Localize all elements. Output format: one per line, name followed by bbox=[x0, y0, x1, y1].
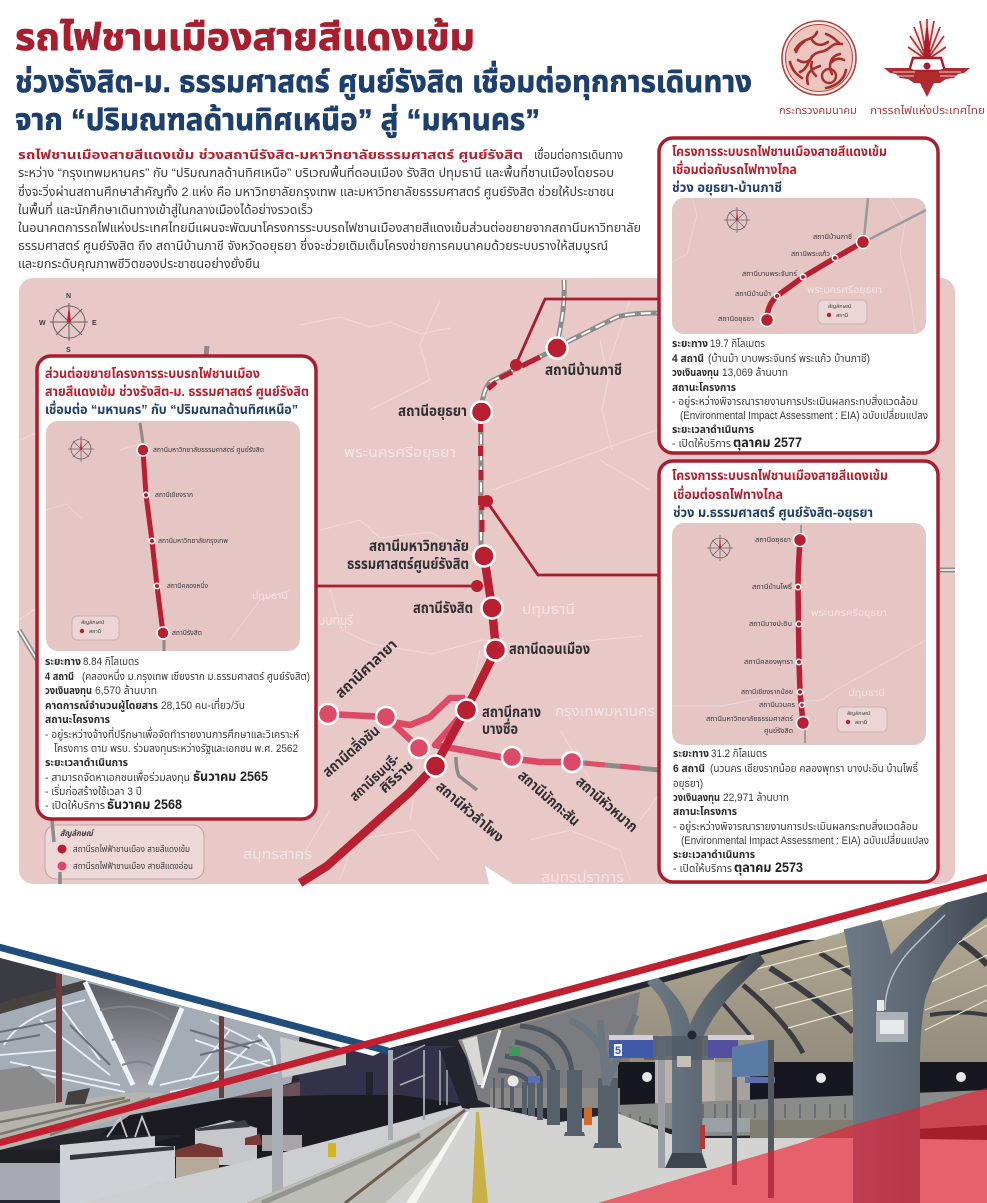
light red line bbox=[328, 698, 572, 762]
project details: ตุลาคม 2573 bbox=[734, 860, 803, 876]
project details: วงเงินลงทุน bbox=[673, 792, 720, 804]
connector dots bbox=[471, 359, 522, 592]
heading: ช่วง ม.ธรรมศาสตร์ ศูนย์รังสิต-อยุธยา bbox=[673, 505, 873, 521]
station labels: สถานีธนบุรี- bbox=[346, 750, 403, 805]
station labels: สถานีหัวหมาก bbox=[572, 773, 641, 836]
route inset map: สถานีคลองพุทรา bbox=[744, 658, 793, 667]
project details: ตุลาคม 2577 bbox=[733, 435, 802, 451]
station labels: สถานีอยุธยา bbox=[398, 403, 467, 420]
legend: สถานีรถไฟฟ้าชานเมือง สายสีแดงเข้ม bbox=[73, 844, 190, 854]
subtitle: ช่วงรังสิต-ม. ธรรมศาสตร์ ศูนย์รังสิต เชื่อมต่อทุกการเดินทาง bbox=[15, 60, 752, 100]
project details: (คลองหนึ่ง ม.กรุงเทพ เชียงราก ม.ธรรมศาสตร์ ศูนย์รังสิต) bbox=[82, 668, 310, 683]
project details: - เริ่มก่อสร้างใช้เวลา 3 ปี bbox=[45, 784, 142, 798]
route inset map: สถานี bbox=[836, 312, 848, 319]
intro text block: ธรรมศาสตร์ ศูนย์รังสิต ถึง สถานีบ้านภาชี จังหวัดอยุธยา ซึ่งจะช่วยเติมเต็มโครงข่ายการคมนาคมด้วยระบบรางให้สมบูรณ์ bbox=[18, 237, 608, 253]
province labels bbox=[243, 444, 655, 886]
red floor overlay bbox=[598, 1088, 987, 1203]
project details: - อยู่ระหว่างพิจารณารายงานการประเมินผลกระทบสิ่งแวดล้อม bbox=[673, 819, 918, 833]
route inset map: สัญลักษณ์ bbox=[847, 710, 870, 717]
project details: ระยะทาง bbox=[672, 338, 708, 350]
project details: วงเงินลงทุน bbox=[45, 685, 92, 697]
project details: 6 สถานี bbox=[673, 763, 705, 775]
panel: Thammasat-Ayutthaya bbox=[659, 461, 938, 882]
logo: State Railway of Thailand bbox=[870, 19, 985, 117]
heading: โครงการระบบรถไฟชานเมืองสายสีแดงเข้ม bbox=[672, 144, 887, 159]
project details: 22,971 ล้านบาท bbox=[723, 792, 789, 804]
project details: สถานะโครงการ bbox=[673, 806, 737, 818]
project details: (นวนคร เชียงรากน้อย คลองพุทรา บางปะอิน บ้านโพธิ์ bbox=[710, 762, 918, 775]
route inset map bbox=[46, 421, 300, 651]
signs: 5 bbox=[615, 1045, 621, 1057]
station labels: สถานีตลิ่งชัน bbox=[318, 721, 383, 781]
province labels: สมุทรสาคร bbox=[243, 846, 312, 863]
project details: ธันวาคม 2568 bbox=[107, 797, 182, 812]
route inset map: สถานีนวนคร bbox=[759, 701, 796, 709]
intro text block: ในพื้นที่ และนักศึกษาเดินทางเข้าสู่ในกลางเมืองได้อย่างรวดเร็ว bbox=[18, 201, 313, 217]
route inset map: ปทุมธานี bbox=[252, 590, 288, 602]
intro text block: ซึ่งจะวิ่งผ่านสถานศึกษาสำคัญทั้ง 2 แห่ง คือ มหาวิทยาลัยกรุงเทพ และมหาวิทยาลัยธรรมศาสตร์ ศูนย์รังสิต ช่วยให้ประชาชน bbox=[18, 183, 614, 199]
project details: - เปิดให้บริการ bbox=[673, 863, 732, 875]
route inset map bbox=[672, 523, 926, 745]
heading: เชื่อมต่อกับรถไฟทางไกล bbox=[672, 160, 797, 177]
route inset map: สถานีเชียงราก bbox=[155, 491, 193, 499]
stations bbox=[318, 338, 582, 776]
project details bbox=[672, 338, 928, 451]
project details: สถานะโครงการ bbox=[672, 382, 736, 394]
station labels: สถานีมักกะสัน bbox=[514, 767, 583, 830]
project details: คาดการณ์จำนวนผู้โดยสาร bbox=[45, 699, 158, 712]
left roof bbox=[0, 955, 300, 1150]
station labels: บางซื่อ bbox=[482, 718, 518, 738]
project details: ระยะทาง bbox=[673, 748, 709, 760]
project details: - สามารถจัดหาเอกชนเพื่อร่วมลงทุน bbox=[45, 769, 190, 784]
icon: compass: S bbox=[66, 347, 71, 354]
icon: compass: N bbox=[66, 293, 71, 300]
station labels bbox=[318, 361, 641, 846]
panel: main route map bbox=[19, 278, 955, 886]
project details: 28,150 คน-เที่ยว/วัน bbox=[161, 697, 245, 712]
project details: (Environmental Impact Assessment : EIA) ฉบับเปลี่ยนแปลง bbox=[680, 407, 928, 422]
route inset map: สถานีมหาวิทยาลัยกรุงเทพ bbox=[158, 537, 228, 546]
town bbox=[100, 1095, 461, 1165]
red diagonal stripe bbox=[0, 876, 987, 1144]
intro text block: เชื่อมต่อการเดินทาง bbox=[534, 146, 623, 162]
big column bbox=[843, 889, 987, 1203]
station labels: สถานีหัวลำโพง bbox=[432, 778, 507, 846]
heading: เชื่อมต่อ “มหานคร” กับ “ปริมณฑลด้านทิศเหนือ” bbox=[45, 400, 298, 417]
route inset map: ศูนย์รังสิต bbox=[764, 727, 793, 735]
subtitle bbox=[15, 60, 752, 138]
route inset map: สัญลักษณ์ bbox=[81, 619, 104, 626]
subtitle: จาก “ปริมณฑลด้านทิศเหนือ” สู่ “มหานคร” bbox=[15, 104, 540, 138]
province labels: กรุงเทพมหานคร bbox=[555, 703, 655, 720]
station labels: สถานีบ้านภาชี bbox=[545, 361, 622, 379]
route inset map: สถานีคลองหนึ่ง bbox=[167, 580, 208, 590]
project details: ระยะทาง bbox=[45, 656, 81, 668]
project details: ระยะเวลาดำเนินการ bbox=[673, 849, 755, 861]
logo: State Railway of Thailand: การรถไฟแห่งประเทศไทย bbox=[870, 104, 985, 117]
heading: ช่วง อยุธยา-บ้านภาชี bbox=[672, 180, 782, 195]
project details: อยุธยา) bbox=[673, 778, 703, 790]
grey railway tracks bbox=[19, 280, 955, 790]
route inset map: สถานีบ้านภาชี bbox=[813, 233, 852, 241]
route inset map: สถานีพระแก้ว bbox=[791, 250, 830, 258]
light roof fragment bbox=[280, 1037, 346, 1078]
logo: Ministry of Transport seal bbox=[779, 21, 857, 117]
route inset map: พระนครศรีอยุธยา bbox=[807, 284, 882, 296]
project details: (บ้านม้า บาบพระจันทร์ พระแก้ว บ้านภาชี) bbox=[708, 353, 870, 365]
icon: compass: W bbox=[39, 320, 46, 327]
route inset map bbox=[672, 198, 926, 334]
legend bbox=[45, 820, 204, 884]
project details bbox=[673, 748, 929, 876]
route inset map: สถานีมหาวิทยาลัยธรรมศาสตร์ ศูนย์รังสิต bbox=[153, 446, 264, 454]
white sheds bbox=[0, 1136, 175, 1203]
intro text block: ในอนาคตการรถไฟแห่งประเทศไทยมีแผนจะพัฒนาโครงการระบบรถไฟชานเมืองสายสีแดงเข้มส่วนต่อขยายจากสถานีมหาวิทยาลัย bbox=[18, 221, 641, 235]
heading bbox=[672, 468, 888, 521]
intro text block: ระหว่าง “กรุงเทพมหานคร” กับ “ปริมณฑลด้านทิศเหนือ” บริเวณพื้นที่ดอนเมือง รังสิต ปทุมธานี และพื้นที่ชานเมืองโดยรอบ bbox=[18, 164, 614, 180]
heading: สายสีแดงเข้ม ช่วงรังสิต-ม. ธรรมศาสตร์ ศูนย์รังสิต bbox=[45, 384, 309, 400]
project details: สถานะโครงการ bbox=[45, 714, 110, 726]
fittings bbox=[508, 1047, 966, 1086]
project details: (Environmental Impact Assessment : EIA) ฉบับเปลี่ยนแปลง bbox=[681, 832, 929, 847]
title: รถไฟชานเมืองสายสีแดงเข้ม bbox=[15, 17, 475, 58]
columns in perspective bbox=[493, 1070, 622, 1148]
wall and tracks bbox=[83, 1045, 470, 1203]
route inset map: สถานี bbox=[89, 628, 101, 635]
route inset map: สถานีอยุธยา bbox=[718, 315, 754, 324]
route inset map: สถานีบ้านโพธิ์ bbox=[752, 582, 792, 591]
route inset map: สถานีบ้านม้า bbox=[735, 290, 771, 298]
project details: 6,570 ล้านบาท bbox=[95, 685, 157, 697]
project details: ระยะเวลาดำเนินการ bbox=[672, 424, 754, 436]
houses bbox=[175, 1120, 302, 1179]
project details: 13,069 ล้านบาท bbox=[722, 367, 788, 379]
connector lines to panels bbox=[315, 299, 660, 586]
heading: เชื่อมต่อรถไฟทางไกล bbox=[673, 485, 783, 502]
station labels: สถานีมหาวิทยาลัย bbox=[369, 538, 469, 555]
route inset map: สถานีมหาวิทยาลัยธรรมศาสตร์ bbox=[706, 715, 794, 723]
platform arches bbox=[570, 1015, 636, 1085]
project details: - อยู่ระหว่างจ้างที่ปรึกษาเพื่อจัดทำรายงานการศึกษาและวิเคราะห์ bbox=[45, 726, 299, 741]
route inset map: สถานีบางปะอิน bbox=[749, 620, 792, 628]
station labels: ศิริราช bbox=[376, 757, 416, 796]
legend: สัญลักษณ์ bbox=[60, 828, 95, 838]
heading bbox=[672, 144, 887, 195]
route inset map: สัญลักษณ์ bbox=[828, 303, 851, 310]
project details: - เปิดให้บริการ bbox=[45, 800, 105, 812]
panel: Rangsit-Thammasat extension bbox=[37, 356, 316, 819]
project details: ธันวาคม 2565 bbox=[193, 769, 268, 784]
station labels: ธรรมศาสตร์ศูนย์รังสิต bbox=[347, 556, 469, 574]
project details: - อยู่ระหว่างพิจารณารายงานการประเมินผลกระทบสิ่งแวดล้อม bbox=[672, 394, 918, 408]
second column with arch bbox=[644, 950, 765, 1168]
project details: - เปิดให้บริการ bbox=[672, 438, 731, 450]
project details: วงเงินลงทุน bbox=[672, 367, 719, 379]
station labels: สถานีรังสิต bbox=[413, 600, 473, 617]
heading bbox=[45, 366, 309, 417]
dark red main line bbox=[300, 556, 496, 883]
intro text block bbox=[18, 146, 641, 271]
icon: compass bbox=[39, 293, 97, 354]
project details: 4 สถานี bbox=[45, 671, 74, 683]
route inset map: สถานีเชียงรากน้อย bbox=[741, 688, 793, 696]
panel: Ayutthaya-Ban Phachi bbox=[659, 138, 938, 453]
photo: station montage bbox=[0, 876, 987, 1203]
route inset map: ปทุมธานี bbox=[848, 687, 885, 699]
route inset map: สถานี bbox=[855, 719, 867, 726]
right roof bbox=[440, 892, 987, 1110]
dashed red extension bbox=[480, 357, 540, 532]
heading: ส่วนต่อขยายโครงการระบบรถไฟชานเมือง bbox=[45, 366, 260, 381]
intro text block: และยกระดับคุณภาพชีวิตของประชาชนอย่างยั่งยืน bbox=[18, 256, 260, 271]
blue diagonal stripe bbox=[0, 946, 388, 1051]
province labels: ปทุมธานี bbox=[522, 601, 575, 618]
white sea sliver bbox=[485, 866, 513, 884]
heading: โครงการระบบรถไฟชานเมืองสายสีแดงเข้ม bbox=[672, 468, 888, 483]
icon: compass: E bbox=[92, 320, 97, 327]
station labels: สถานีดอนเมือง bbox=[509, 641, 590, 658]
route inset map: สถานีอยุธยา bbox=[755, 536, 791, 545]
project details bbox=[45, 656, 310, 812]
station labels: สถานีศาลายา bbox=[332, 636, 401, 702]
project details: ระยะเวลาดำเนินการ bbox=[45, 757, 128, 769]
route inset map: พระนครศรีอยุธยา bbox=[811, 607, 887, 619]
project details: 19.7 กิโลเมตร bbox=[710, 338, 765, 350]
project details: โครงการ ตาม พรบ. ร่วมลงทุนระหว่างรัฐและเอกชน พ.ศ. 2562 bbox=[54, 742, 298, 755]
province labels: พระนครศรีอยุธยา bbox=[344, 444, 456, 461]
route inset map: สถานีบาบพระจันทร์ bbox=[742, 270, 798, 278]
signs bbox=[609, 1035, 774, 1198]
province labels: สมุทรปราการ bbox=[541, 869, 624, 886]
legend: สถานีรถไฟฟ้าชานเมือง สายสีแดงอ่อน bbox=[73, 861, 193, 871]
logo: Ministry of Transport seal: กระทรวงคมนาคม bbox=[779, 105, 857, 117]
project details: 31.2 กิโลเมตร bbox=[711, 748, 767, 760]
province labels: นนทบุรี bbox=[318, 612, 353, 629]
project details: 4 สถานี bbox=[672, 353, 704, 365]
intro text block: รถไฟชานเมืองสายสีแดงเข้ม ช่วงสถานีรังสิต-มหาวิทยาลัยธรรมศาสตร์ ศูนย์รังสิต bbox=[18, 148, 523, 163]
back of station bbox=[490, 1056, 987, 1138]
project details: 8.84 กิโลเมตร bbox=[83, 656, 139, 668]
platform bbox=[385, 1107, 987, 1203]
sky bbox=[222, 1046, 460, 1104]
route inset map: สถานีรังสิต bbox=[172, 629, 202, 637]
station labels: สถานีกลาง bbox=[482, 704, 541, 721]
